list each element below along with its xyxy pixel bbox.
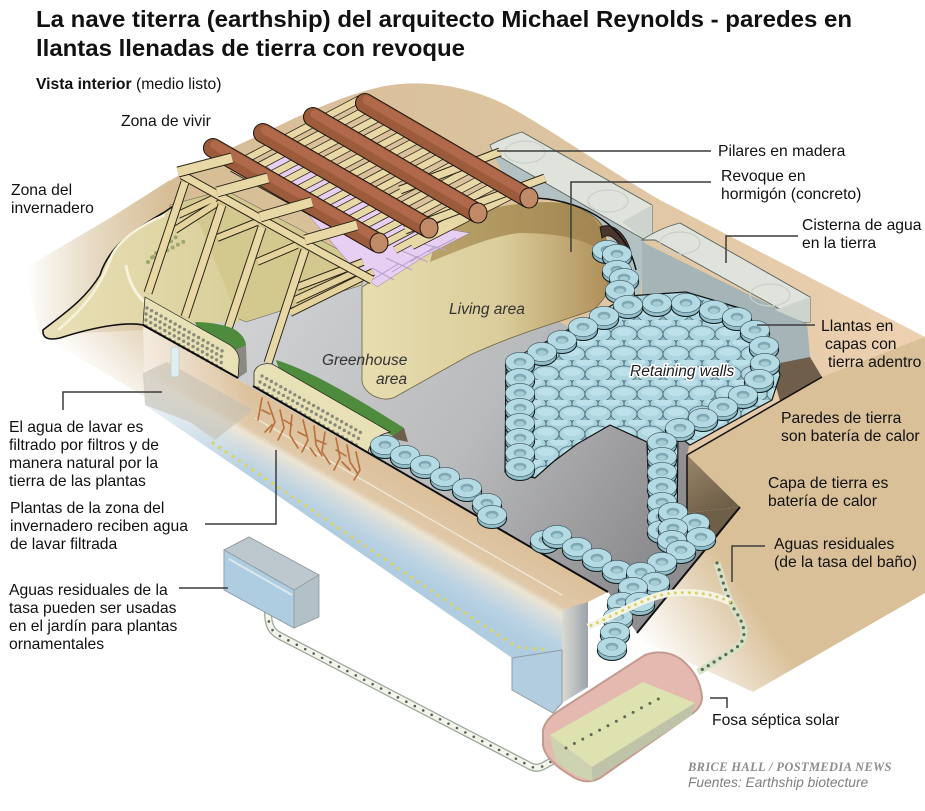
floor: [143, 280, 740, 633]
label: cisterna: Cisterna de agua: [802, 217, 921, 234]
ground: left earth berm fade: [25, 180, 170, 345]
ground: soft fade under mound: [43, 322, 150, 400]
title line 2: llantas llenadas de tierra con revoque: [36, 35, 465, 61]
retaining wall tire mass: [505, 292, 780, 530]
solar septic tank: [543, 652, 702, 781]
label: plantas invernadero: invernadero reciben agua: [10, 518, 188, 535]
subtitle: Vista interior (medio listo): [36, 76, 221, 93]
cistern 2: [642, 223, 810, 372]
label: cisterna: en la tierra: [802, 235, 876, 252]
label: llantas: capas con: [825, 336, 897, 353]
tires: front corner pile: [530, 502, 716, 660]
label: pilares: Pilares en madera: [718, 143, 846, 160]
living area wall: [362, 198, 636, 399]
grey water pipe to tank: [268, 612, 563, 768]
credit: BRICE HALL / POSTMEDIA NEWS: [687, 760, 892, 774]
label: llantas: Llantas en: [821, 318, 893, 335]
label: aguas residuales baño: Aguas residuales: [774, 536, 894, 553]
interior labels: Living area: [449, 301, 525, 318]
label: zona del invernadero: invernadero: [11, 200, 94, 217]
tires: back rim: [505, 240, 780, 544]
label: aguas residuales jardín: ornamentales: [9, 636, 104, 653]
log beams: [213, 100, 538, 253]
title line 1: La nave titerra (earthship) del arquitecto Michael Reynolds - paredes en: [36, 6, 852, 32]
timber frame: [148, 158, 373, 363]
label: revoque: Revoque en: [721, 168, 806, 185]
label: aguas residuales jardín: tasa pueden ser usadas: [9, 600, 177, 617]
wall top edge line: [143, 325, 608, 592]
label: agua de lavar: tierra de las plantas: [9, 473, 146, 490]
label: llantas: tierra adentro: [828, 354, 922, 371]
label: plantas invernadero: de lavar filtrada: [10, 536, 118, 553]
label: agua de lavar: El agua de lavar es: [9, 419, 143, 436]
label: agua de lavar: filtrado por filtros y de: [9, 437, 159, 454]
roof lattice: [232, 99, 545, 250]
interior labels: Retaining walls: [630, 363, 734, 380]
label: agua de lavar: manera natural por la: [9, 455, 158, 472]
sources: Fuentes: Earthship biotecture: [688, 775, 869, 790]
cistern 1: [490, 132, 652, 300]
interior labels: area: [376, 371, 407, 388]
interior labels: [322, 301, 734, 388]
interior labels: Greenhouse: [322, 352, 408, 369]
ground: upper earth berm: [168, 83, 925, 470]
left planter: [143, 297, 247, 378]
label: aguas residuales jardín: Aguas residuales de la: [9, 582, 168, 599]
label: revoque: hormigón (concreto): [721, 186, 861, 203]
sewage pipe: [588, 563, 744, 672]
label: fosa séptica: Fosa séptica solar: [712, 712, 839, 729]
foundation cross-section: [143, 325, 608, 713]
label: plantas invernadero: Plantas de la zona del: [10, 500, 164, 517]
label: paredes de tierra: son batería de calor: [781, 428, 920, 445]
pink adobe insulation: [262, 150, 470, 287]
right planter with plants: [254, 360, 408, 452]
greenhouse mound and back wall: [43, 190, 362, 339]
storage tank: [224, 537, 319, 628]
leader lines: [63, 151, 815, 708]
right earth block: [637, 337, 925, 692]
dark space behind wall: [770, 357, 822, 401]
label: zona del invernadero: Zona del: [11, 182, 72, 199]
label: capa de tierra: batería de calor: [768, 493, 877, 510]
tires: front wall left: [370, 435, 507, 528]
label: aguas residuales jardín: en el jardín para plantas: [9, 618, 177, 635]
plant roots: [258, 398, 360, 480]
retaining wall tire mass base: [505, 292, 780, 530]
label: capa de tierra: Capa de tierra es: [768, 475, 888, 492]
label: aguas residuales baño: (de la tasa del baño): [774, 554, 917, 571]
label: zona de vivir: Zona de vivir: [121, 113, 211, 130]
label: paredes de tierra: Paredes de tierra: [781, 410, 901, 427]
